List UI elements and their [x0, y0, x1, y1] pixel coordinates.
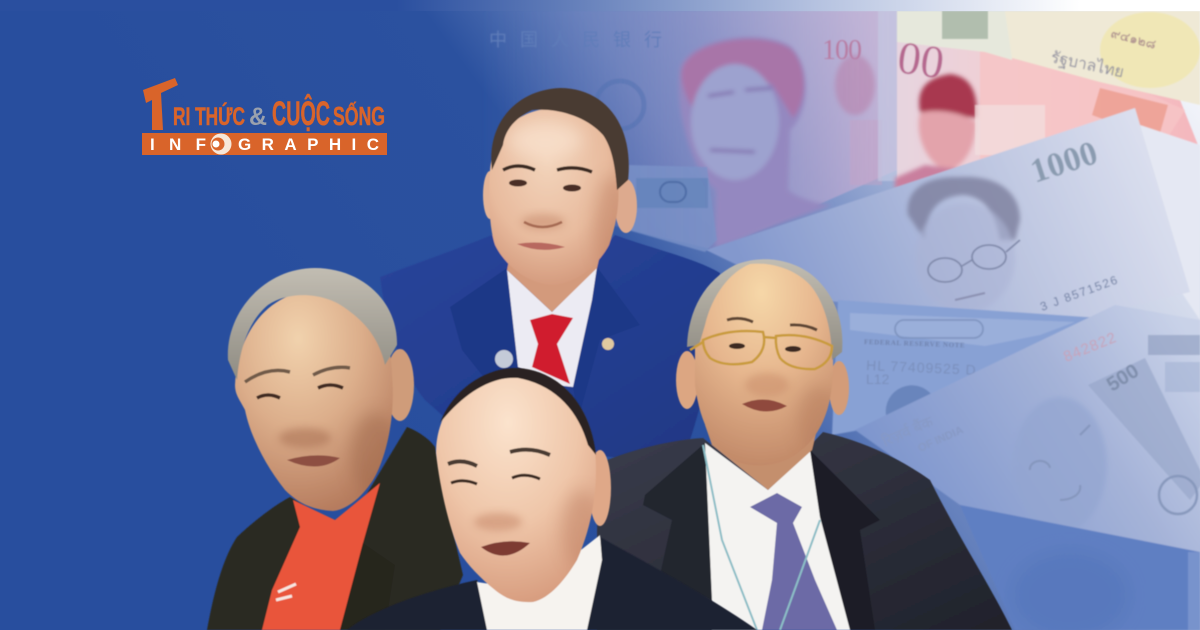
banknote: thai riel	[1005, 11, 1200, 105]
logo: wordmark: RI THỨC	[173, 101, 245, 131]
portrait: Gandhi	[1013, 397, 1107, 533]
portrait: King	[908, 177, 1020, 313]
logo: wordmark: CUỘC	[272, 94, 330, 133]
person: left man	[207, 268, 463, 630]
banknote: yuan: 100	[822, 35, 861, 66]
hair	[228, 268, 397, 380]
person: top man	[380, 88, 720, 458]
banknotes	[480, 11, 1200, 630]
face	[489, 108, 619, 285]
face	[235, 290, 393, 511]
shirt and tie	[507, 267, 597, 387]
banknote: rupee 500: रिज़र्व बैंक	[879, 412, 936, 451]
banknote: baht 1000	[706, 108, 1190, 318]
face shading	[745, 372, 830, 438]
tie	[750, 493, 837, 630]
face	[436, 372, 596, 602]
logo: T emblem	[143, 78, 178, 130]
suit	[597, 432, 1012, 630]
features	[245, 367, 350, 382]
hair	[687, 259, 842, 360]
person: center man	[347, 368, 757, 630]
banknote: yuan	[480, 11, 898, 250]
suit	[380, 235, 720, 458]
jacket	[207, 427, 463, 630]
shirt	[705, 443, 850, 630]
portrait: Sukarno	[895, 74, 977, 190]
face shading	[474, 490, 602, 570]
features	[448, 450, 550, 466]
banknote: rupee 500: 500	[1103, 360, 1143, 396]
neck	[705, 425, 818, 490]
logo: infographic band	[142, 133, 387, 155]
person: right man	[597, 259, 1012, 630]
portrait: Mao	[679, 37, 832, 248]
logo: wordmark: SỐNG	[333, 101, 385, 131]
logo: &	[249, 103, 267, 131]
face	[695, 262, 833, 465]
banknote: rupee 500: 842822	[1061, 329, 1119, 366]
hair	[440, 368, 596, 455]
banknote: rupiah: 00	[895, 31, 947, 88]
pins	[495, 350, 513, 368]
banknote: rupee 500: OF INDIA	[916, 424, 965, 455]
features	[503, 166, 592, 172]
banknote: thai riel: รัฐบาลไทย	[1049, 47, 1126, 81]
neck	[507, 255, 600, 312]
ears	[676, 351, 698, 409]
top strip	[0, 0, 1200, 11]
face shading	[278, 411, 390, 488]
banknote: dollar corner near top man	[628, 165, 717, 252]
ear	[386, 349, 414, 421]
face shading	[506, 119, 618, 256]
logo	[142, 78, 387, 155]
banknote: lower fade	[960, 505, 1200, 630]
banknote: baht 1000: 3 J 8571526	[1038, 272, 1121, 314]
logo: GRAPHIC	[238, 135, 379, 154]
suit	[347, 537, 757, 630]
banknote: dollar: FEDERAL RESERVE NOTE	[864, 338, 965, 350]
ears	[483, 171, 497, 219]
banknote: rupiah	[895, 11, 1200, 190]
logo: wordmark	[173, 94, 385, 133]
banknote: thai riel: ๙๔๑๒๘	[1109, 25, 1158, 52]
banknote: dollar: L12	[866, 371, 890, 387]
logo: INF	[150, 135, 206, 154]
ear	[589, 450, 611, 526]
features	[727, 318, 817, 330]
shirt	[262, 483, 380, 630]
banknote: baht 1000: 1000	[1026, 134, 1102, 191]
glasses	[690, 331, 832, 369]
banknote: yuan: 中国人民银行	[489, 30, 675, 50]
banknote: dollar	[832, 300, 1100, 435]
banknote: rupee 500	[855, 305, 1200, 552]
hair	[491, 88, 629, 190]
banknote: dollar: HL 77409525 D	[866, 357, 977, 378]
shirt	[477, 535, 602, 630]
banknote: pale right note	[1140, 125, 1200, 320]
